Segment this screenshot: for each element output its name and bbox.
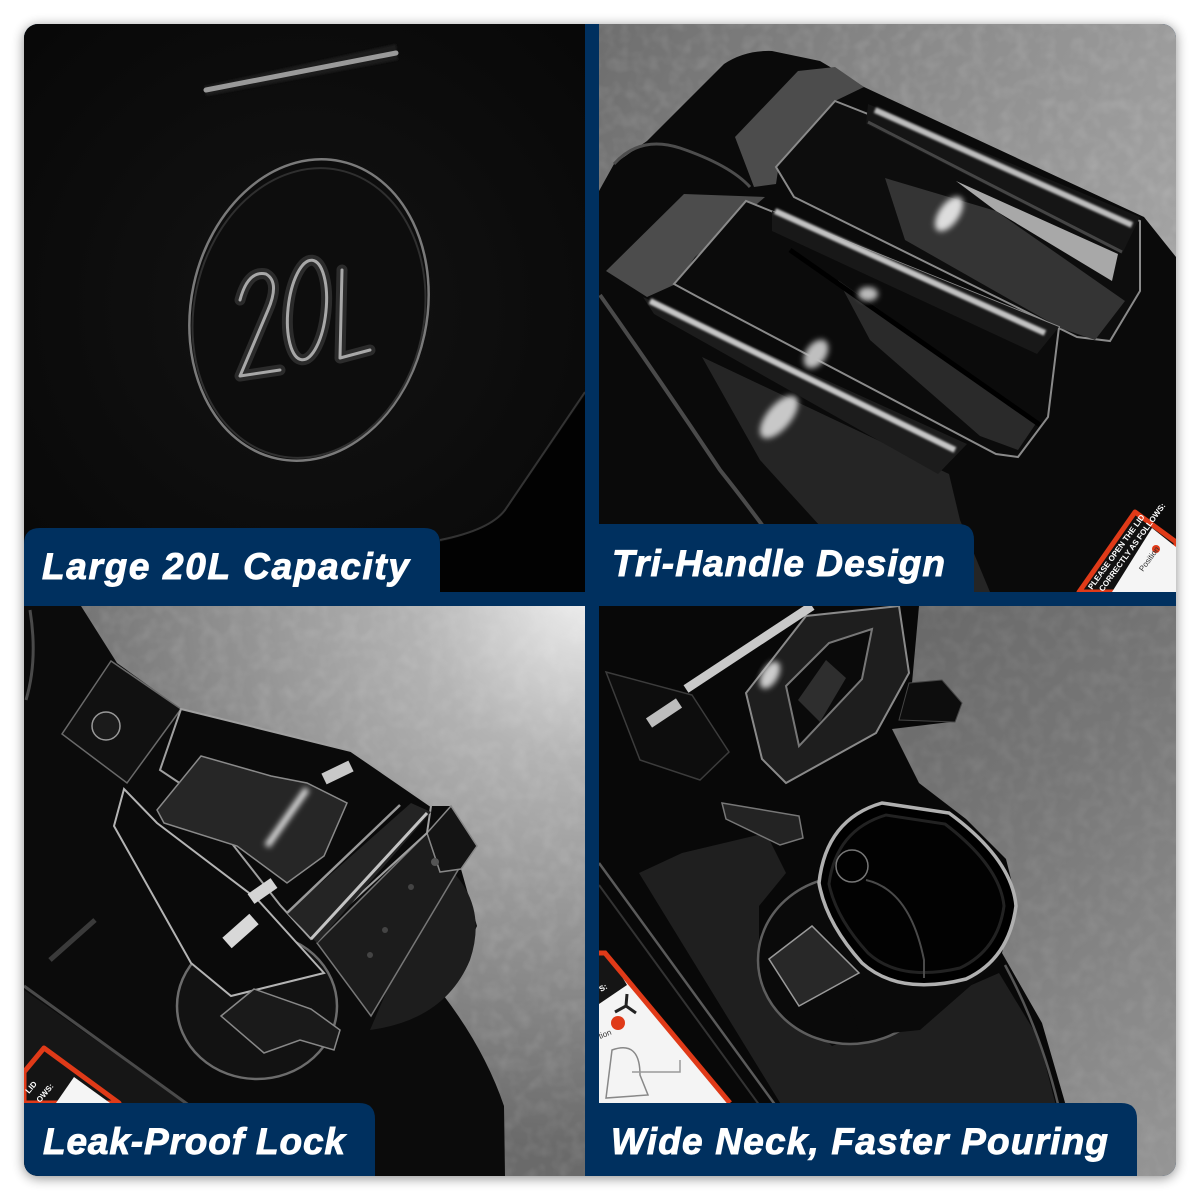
front handle bar [643, 297, 967, 474]
label: large 20L capacity [24, 528, 440, 592]
panel: tri-handle design photo [599, 24, 1176, 593]
neck ring [177, 933, 337, 1079]
warning sticker [597, 952, 730, 1103]
divider: vertical bar [585, 24, 599, 1176]
warning sticker: OWS: [35, 1082, 56, 1104]
lid plate and disk [317, 806, 477, 1030]
label: tri-handle design [585, 524, 974, 592]
neck tube [819, 803, 1016, 1036]
body edge [599, 294, 764, 524]
lock pins [227, 766, 351, 943]
lock frame [160, 709, 431, 939]
panel: wide neck photo [597, 606, 1176, 1176]
front handle window [674, 201, 1059, 457]
latch [221, 989, 340, 1053]
label: large 20L capacity: Large 20L Capacity [42, 546, 411, 587]
panel: large 20L capacity photo [24, 24, 585, 592]
label: tri-handle design: Tri-Handle Design [612, 543, 945, 584]
label: wide neck, faster pouring: Wide Neck, Faster Pouring [611, 1121, 1108, 1162]
body sheen [24, 990, 190, 1106]
warning sticker: LID [24, 1079, 39, 1095]
hinge plate [606, 672, 729, 780]
embossed circle with 20L [188, 158, 430, 462]
label: wide neck, faster pouring [585, 1103, 1137, 1176]
label: leak-proof lock: Leak-Proof Lock [43, 1121, 347, 1162]
warning sticker: PLEASE OPEN THE LID [1086, 513, 1147, 591]
ring [614, 144, 750, 187]
textured plates [606, 67, 864, 297]
warning sticker: Position [1137, 545, 1161, 573]
neck base ring [756, 880, 900, 1046]
lower body sheen [702, 357, 990, 592]
ribs [287, 803, 431, 943]
lower bracket [722, 803, 803, 845]
back handle bar [866, 104, 1140, 254]
divider: horizontal bar [24, 592, 1176, 606]
embossed line [204, 44, 398, 96]
open lid [746, 606, 909, 783]
panel: leak-proof lock photo [24, 606, 585, 1176]
hinge tab [62, 661, 181, 783]
lid tab [899, 680, 962, 722]
neck strap [769, 926, 859, 1006]
hinge pin [649, 606, 812, 723]
lever [157, 756, 347, 883]
body sheen [639, 833, 1056, 1106]
warning sticker [24, 1048, 119, 1104]
can silhouette [599, 51, 1176, 592]
can silhouette [599, 606, 1066, 1103]
side arm [114, 789, 324, 996]
label: leak-proof lock [24, 1103, 375, 1176]
middle handle bar [772, 211, 1059, 354]
back handle window [776, 101, 1140, 341]
warning sticker: CORRECTLY AS FOLLOWS: [1097, 501, 1167, 593]
can silhouette [24, 606, 505, 1176]
warning sticker: tion [597, 1028, 613, 1041]
warning sticker: S: [598, 982, 609, 994]
